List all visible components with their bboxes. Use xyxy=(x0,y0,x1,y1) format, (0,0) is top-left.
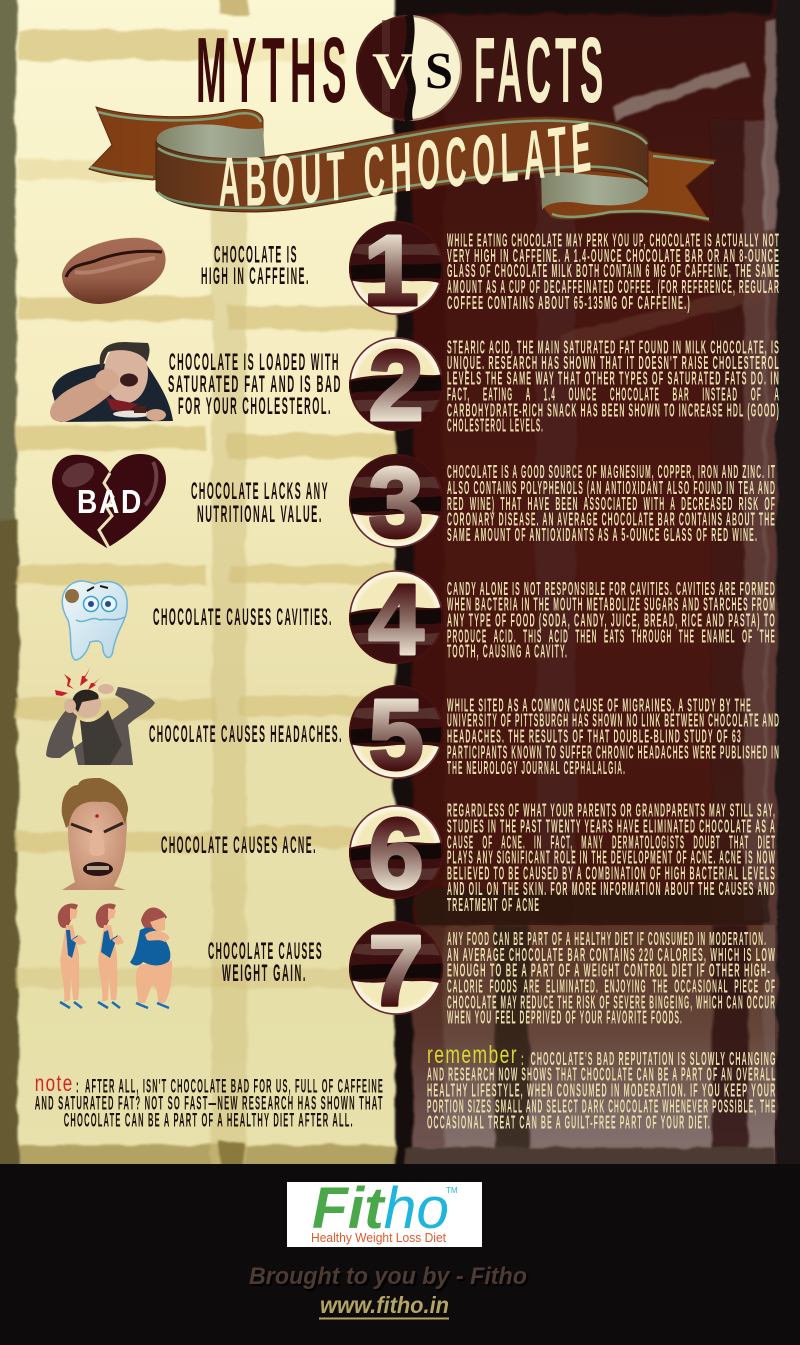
icon: broken heart: BAD xyxy=(77,483,143,520)
text: CHOCOLATE CAUSES ACNE. xyxy=(161,832,317,859)
icon: tooth with cavity xyxy=(62,581,127,660)
text: CHOCOLATE CAN BE A PART OF A HEALTHY DIET AFTER ALL. xyxy=(64,1111,354,1132)
number medallion 3: 3 xyxy=(368,447,424,559)
text: MYTHS xyxy=(196,18,352,122)
icon: broken heart xyxy=(52,454,166,548)
footer band xyxy=(0,1164,800,1345)
text: CHOCOLATE CAUSES xyxy=(208,938,323,965)
myth 1 text xyxy=(201,242,310,290)
note callout: : xyxy=(76,1077,80,1098)
ribbon right tail xyxy=(541,150,717,222)
number medallion 7: 7 xyxy=(368,915,424,1027)
myth 3 text xyxy=(191,478,329,528)
text: NUTRITIONAL VALUE. xyxy=(197,501,323,528)
text: HIGH IN CAFFEINE. xyxy=(201,263,310,290)
fact 1 paragraph xyxy=(447,230,780,313)
remember callout: : xyxy=(521,1048,525,1069)
text: CHOCOLATE LACKS ANY xyxy=(191,478,329,505)
Fitho logo xyxy=(287,1176,482,1247)
vs medallion xyxy=(356,15,462,121)
number medallion 1: 1 xyxy=(363,215,419,327)
remember callout xyxy=(427,1041,777,1132)
fact 6 paragraph: TREATMENT OF ACNE xyxy=(447,894,540,915)
fact 4 paragraph: TOOTH, CAUSING A CAVITY. xyxy=(447,641,568,662)
icon: coffee bean xyxy=(62,238,166,304)
number medallion 3 xyxy=(349,447,443,559)
text: CHOCOLATE CAUSES HEADACHES. xyxy=(149,721,343,748)
icon: three women gaining weight xyxy=(58,903,172,1008)
number medallion 2: 2 xyxy=(368,330,424,442)
fact 3 paragraph xyxy=(447,461,776,545)
first slim woman xyxy=(58,903,87,1008)
myth 7 text xyxy=(208,938,323,987)
text: FOR YOUR CHOLESTEROL. xyxy=(178,393,332,420)
fact 2 paragraph: CHOLESTEROL LEVELS. xyxy=(447,415,544,436)
number medallion 7 xyxy=(349,915,443,1027)
ribbon banner: about chocolate: ABOUT CHOCOLATE xyxy=(220,122,590,206)
icon: man with headache xyxy=(46,668,155,765)
text: CHOCOLATE IS xyxy=(214,242,298,269)
second slim woman xyxy=(96,903,124,1008)
number medallion 4: 4 xyxy=(368,564,424,676)
vs medallion: S xyxy=(425,43,453,100)
number medallion 1 xyxy=(349,215,443,327)
number medallion 2 xyxy=(349,330,443,442)
note callout xyxy=(35,1070,384,1132)
fact 6 paragraph xyxy=(447,800,776,915)
note callout: note xyxy=(35,1070,74,1096)
ribbon banner: about chocolate xyxy=(88,106,718,222)
fact 4 paragraph xyxy=(447,578,776,662)
fact 5 paragraph xyxy=(447,695,780,778)
number medallion 6: 6 xyxy=(368,798,424,910)
vs medallion: V xyxy=(372,43,413,100)
overweight woman xyxy=(130,908,172,1008)
number medallion 5: 5 xyxy=(368,679,424,791)
icon: man eating cake xyxy=(50,342,173,422)
brought to you by: Brought to you by - Fitho xyxy=(249,1263,527,1290)
Fitho logo: Healthy Weight Loss Diet xyxy=(311,1230,446,1245)
remember callout: remember xyxy=(427,1041,518,1069)
icon: angry face with acne xyxy=(62,778,128,890)
fact 7 paragraph xyxy=(447,928,776,1027)
ribbon main band xyxy=(156,117,648,212)
text: WEIGHT GAIN. xyxy=(222,960,307,987)
website link: www.fitho.in xyxy=(320,1292,449,1318)
number medallion 4 xyxy=(349,564,443,676)
fact 2 paragraph xyxy=(447,336,780,436)
number medallion 5 xyxy=(349,679,443,791)
Fitho logo: Fitho xyxy=(312,1176,449,1241)
text: CHOCOLATE IS LOADED WITH xyxy=(169,349,340,376)
text: CHOCOLATE CAUSES CAVITIES. xyxy=(153,604,333,631)
myth 2 text xyxy=(168,349,342,420)
number medallion 6 xyxy=(349,798,443,910)
ribbon folds xyxy=(157,124,265,160)
ribbon left tail xyxy=(89,107,263,180)
text: SATURATED FAT AND IS BAD xyxy=(168,371,342,398)
Fitho logo: TM xyxy=(446,1186,458,1195)
